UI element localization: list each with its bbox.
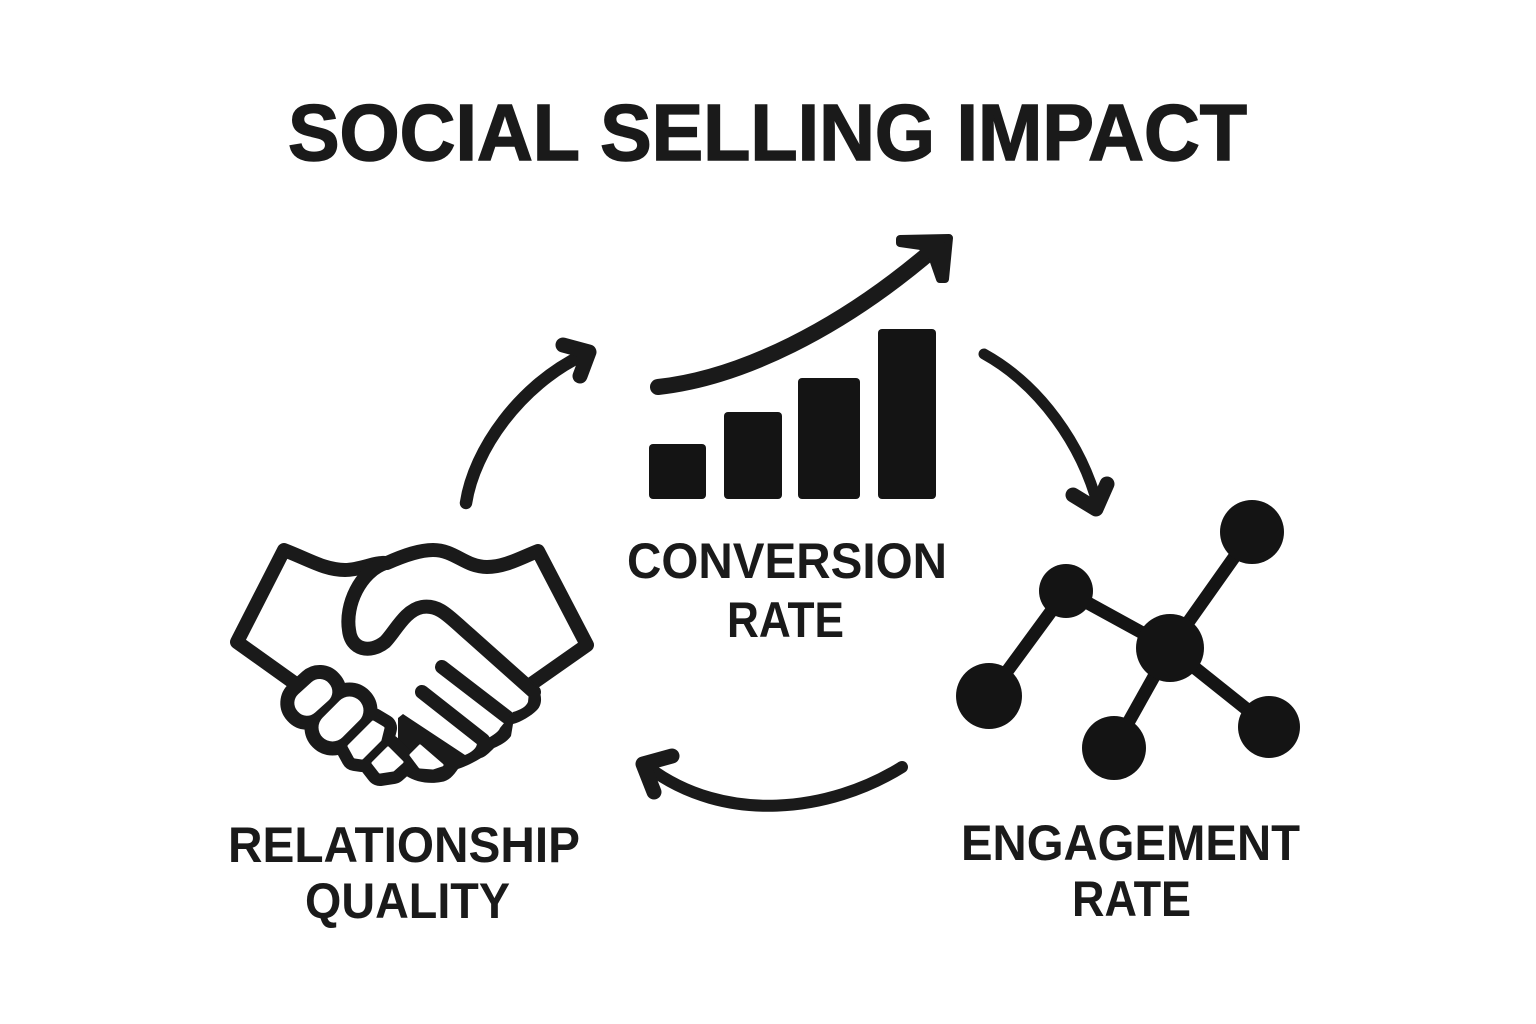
label: relationship quality: QUALITY (305, 873, 510, 929)
title: SOCIAL SELLING IMPACT (288, 88, 1247, 177)
bar 4 (878, 329, 936, 499)
lower right fingers silhouette (398, 682, 541, 783)
label: engagement rate: ENGAGEMENT (961, 815, 1300, 871)
label: conversion rate: CONVERSION (627, 533, 947, 589)
label: conversion rate: RATE (727, 592, 844, 648)
label: relationship quality (228, 817, 580, 929)
icon: network (956, 500, 1300, 780)
left fingers outer shapes (289, 674, 402, 772)
label: engagement rate (961, 815, 1300, 927)
bar 1 (649, 444, 706, 499)
label: engagement rate: RATE (1072, 871, 1191, 927)
label: conversion rate (627, 533, 947, 648)
hand outlines (237, 550, 587, 740)
bar 3 (798, 378, 860, 499)
arrow: relationship to conversion (466, 345, 589, 503)
icon: bar chart with growth arrow (649, 238, 949, 499)
label: relationship quality: RELATIONSHIP (228, 817, 580, 873)
icon: handshake (237, 550, 587, 783)
arrow: conversion to engagement (984, 354, 1107, 509)
arrow: engagement to relationship (643, 756, 902, 806)
growth arrow (658, 238, 949, 387)
bar 2 (724, 412, 782, 499)
finger cells (289, 674, 442, 772)
